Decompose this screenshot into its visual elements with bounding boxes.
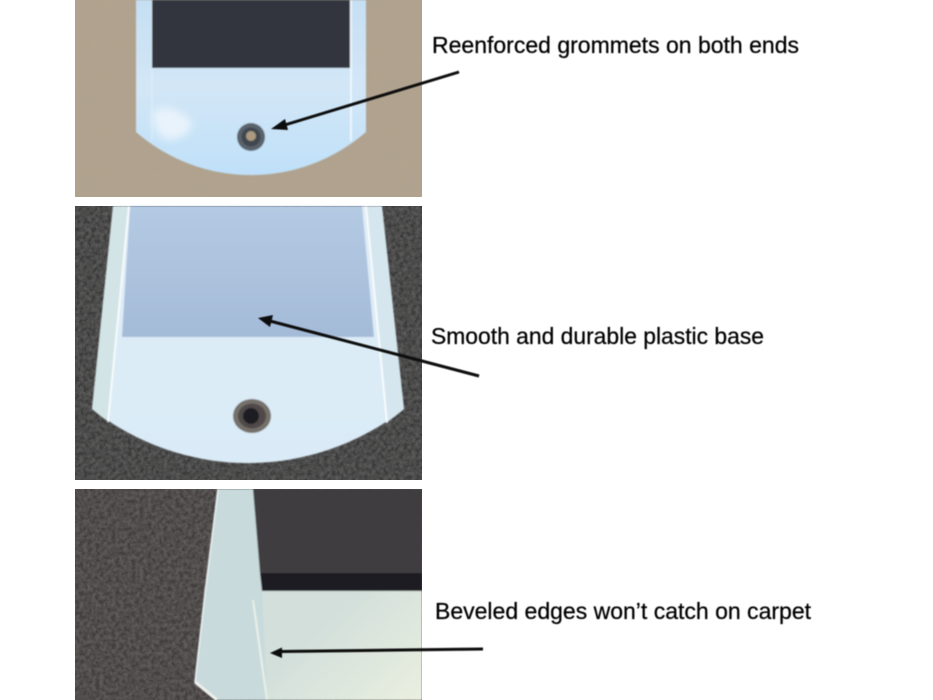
foam pad [253,489,422,573]
photo: beveled edge close-up [75,489,422,700]
label: plastic base: Smooth and durable plastic base [431,323,764,349]
plate [261,588,422,700]
plate with curved end [92,206,404,463]
label: beveled edges: Beveled edges won’t catch on carpet [435,598,812,624]
grommet [233,399,271,433]
label: grommets: Reenforced grommets on both ends [432,32,799,58]
arrow: to plastic base [258,315,479,376]
photo: smooth plastic base on dark background [75,206,422,480]
arrow: to beveled edge [270,648,483,658]
grommet [237,123,265,151]
photo: grommet on tan background [75,0,422,197]
blue shaded base panel [122,206,374,337]
foam pad [152,0,350,68]
arrow: to grommet [271,72,459,130]
plate with curved end [136,0,366,175]
